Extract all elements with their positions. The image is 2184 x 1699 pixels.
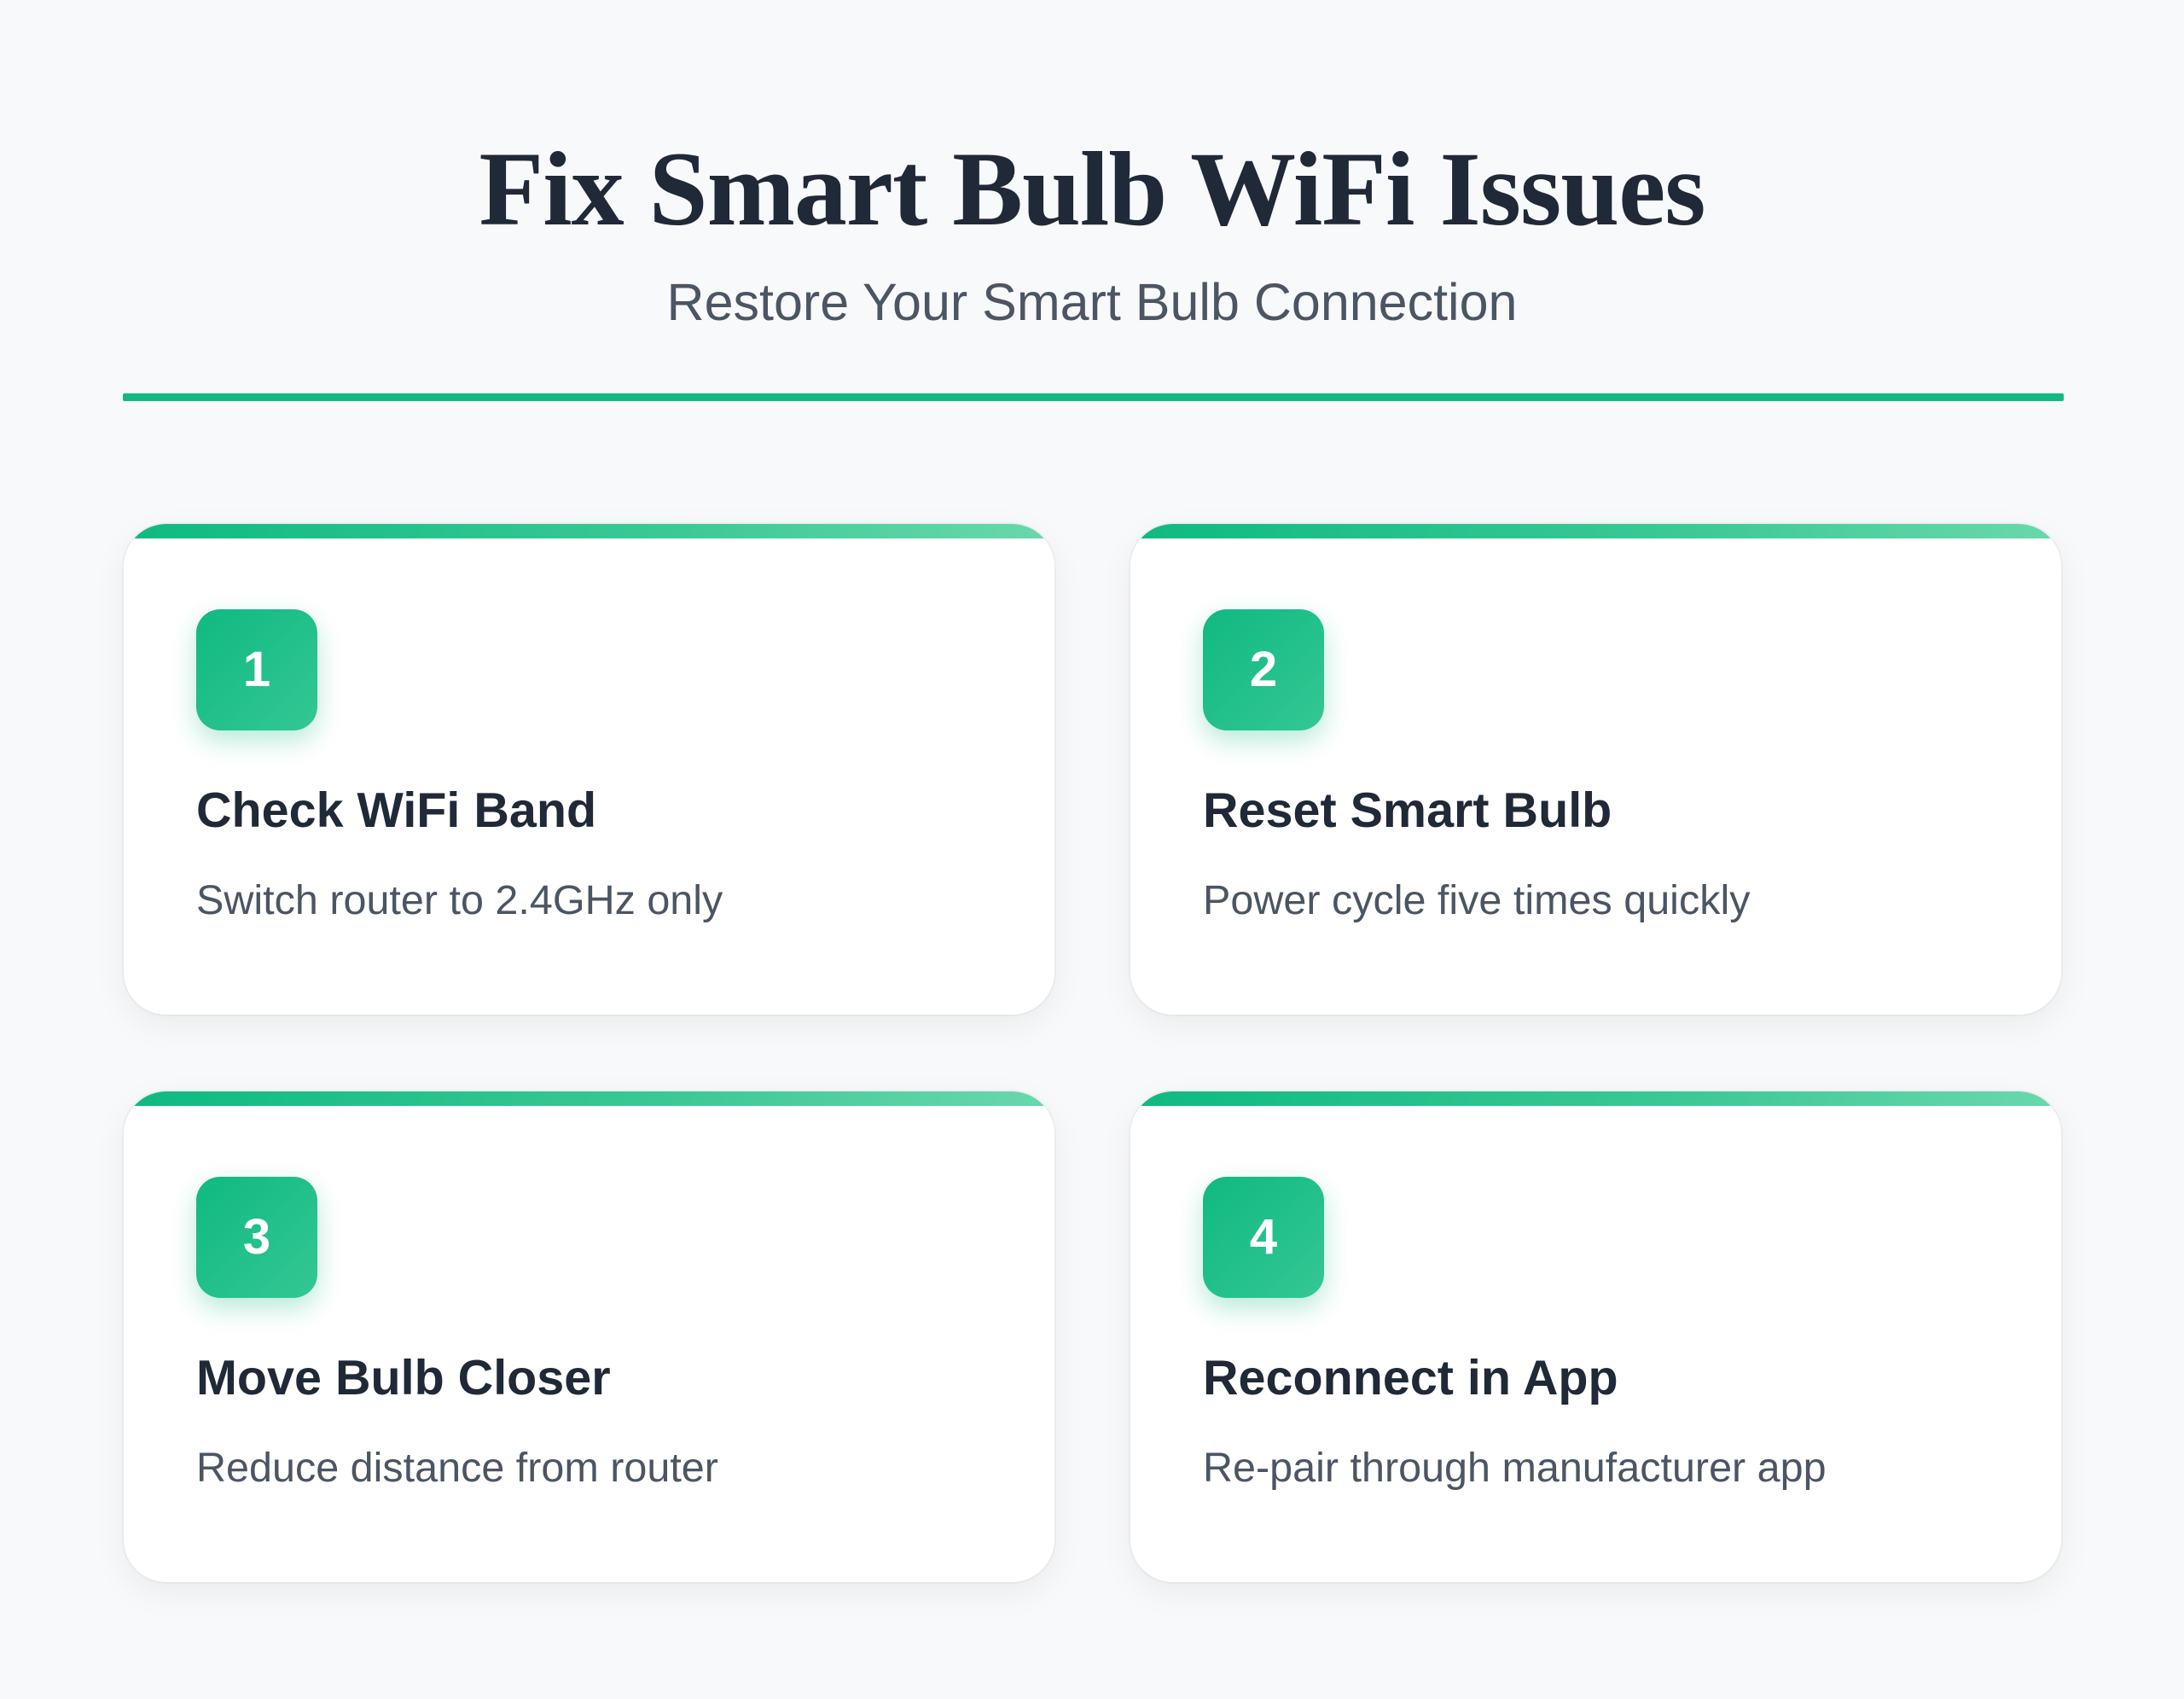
heading 2: Reset Smart Bulb — [1203, 783, 1612, 838]
badge 2 — [1203, 609, 1324, 730]
badge 3: 3 — [243, 1209, 270, 1265]
description 3: Reduce distance from router — [196, 1445, 718, 1491]
badge 3 — [196, 1177, 317, 1298]
title: Fix Smart Bulb WiFi Issues — [479, 131, 1705, 247]
badge 1: 1 — [243, 642, 270, 697]
panel: step 2 — [1130, 524, 2061, 1015]
heading 1: Check WiFi Band — [196, 783, 596, 838]
heading 4: Reconnect in App — [1203, 1351, 1618, 1405]
badge 4: 4 — [1250, 1209, 1277, 1265]
panel: step 4 — [1130, 1091, 2061, 1582]
panel: step 1 — [124, 524, 1054, 1015]
panel: step 3 — [124, 1091, 1054, 1582]
description 1: Switch router to 2.4GHz only — [196, 877, 723, 923]
heading 3: Move Bulb Closer — [196, 1351, 611, 1405]
badge 2: 2 — [1250, 642, 1277, 697]
description 4: Re-pair through manufacturer app — [1203, 1445, 1827, 1491]
badge 1 — [196, 609, 317, 730]
description 2: Power cycle five times quickly — [1203, 877, 1750, 923]
badge 4 — [1203, 1177, 1324, 1298]
subtitle: Restore Your Smart Bulb Connection — [667, 273, 1517, 331]
